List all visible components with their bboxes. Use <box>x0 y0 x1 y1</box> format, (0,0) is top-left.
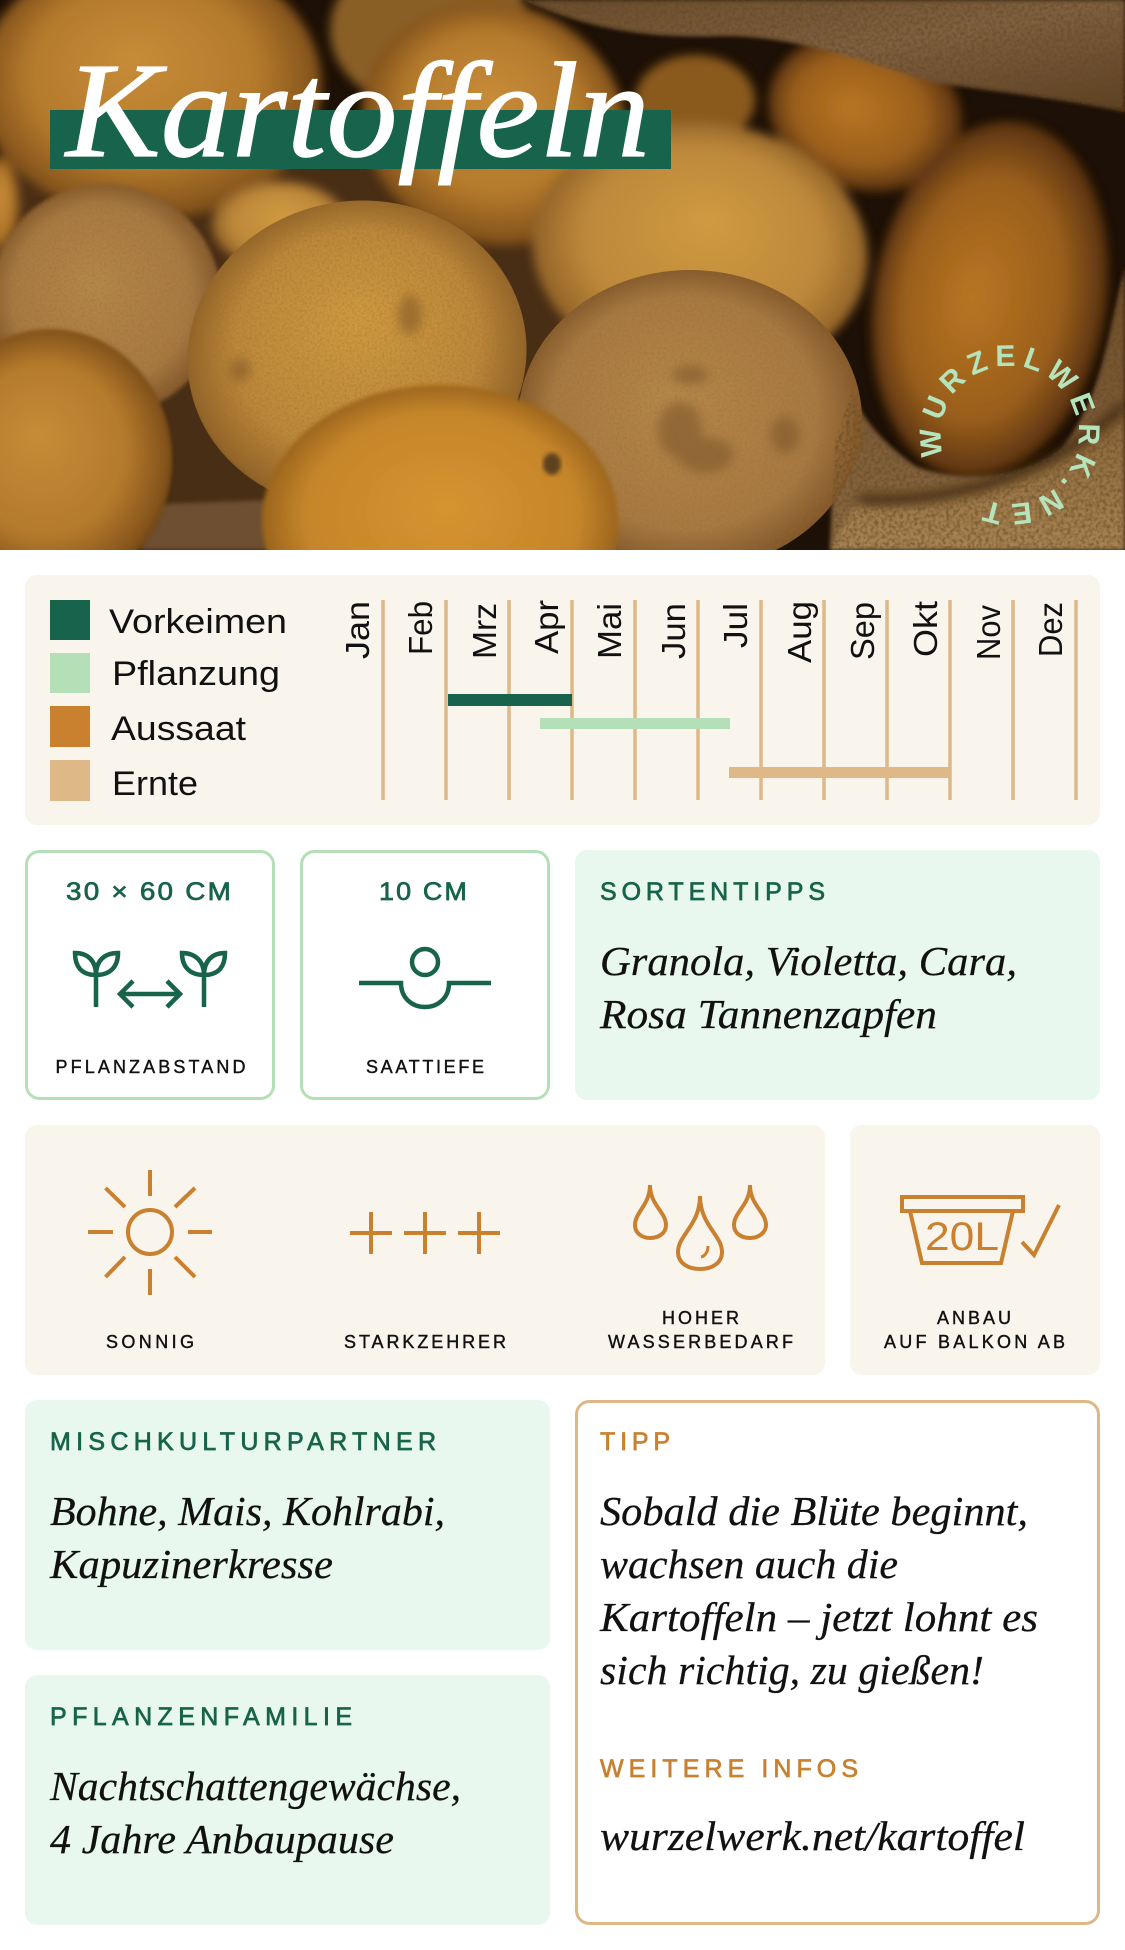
bar: Pflanzung <box>540 718 730 729</box>
legend: Pflanzung <box>50 653 280 693</box>
panel: Tipp: Kartoffeln – jetzt lohnt es <box>599 1594 1038 1640</box>
panel: Pflanzabstand: PFLANZABSTAND <box>56 1057 246 1077</box>
month grid lines <box>383 600 1076 800</box>
panel: balcony: AUF BALKON AB <box>884 1332 1065 1352</box>
panel: Tipp: wurzelwerk.net/kartoffel <box>600 1813 1025 1859</box>
month labels: Mai <box>591 603 628 659</box>
panel: Pflanzabstand: 30 × 60 CM <box>66 878 233 906</box>
panel: Pflanzabstand <box>26 852 274 1098</box>
panel: Tipp: sich richtig, zu gießen! <box>600 1647 984 1693</box>
hero photo: potatoes in burlap sack <box>0 0 1125 655</box>
month labels: Mrz <box>466 603 503 659</box>
panel: balcony: ANBAU <box>937 1308 1011 1328</box>
bar: Ernte <box>729 767 951 778</box>
month labels: Sep <box>844 602 881 660</box>
panel: Saattiefe <box>302 852 548 1098</box>
title: Kartoffeln <box>64 36 650 186</box>
month labels <box>339 600 1069 663</box>
month labels: Okt <box>907 601 944 657</box>
panel: Pflanzenfamilie: PFLANZENFAMILIE <box>50 1703 352 1731</box>
panel: Saattiefe: SAATTIEFE <box>366 1057 484 1077</box>
panel: Mischkulturpartner: MISCHKULTURPARTNER <box>50 1428 436 1456</box>
icon: 20 litre pot with check mark: 20L <box>925 1215 999 1259</box>
legend <box>50 600 287 803</box>
panel: Sortentipps: Granola, Violetta, Cara, <box>600 938 1017 984</box>
panel: Tipp: wachsen auch die <box>600 1541 898 1587</box>
panel: growing conditions: STARKZEHRER <box>344 1332 506 1352</box>
month labels: Jan <box>339 601 376 659</box>
panel: Pflanzenfamilie: 4 Jahre Anbaupause <box>50 1816 394 1862</box>
icon: plants with arrow <box>75 953 225 1007</box>
panel: Mischkulturpartner <box>25 1400 550 1650</box>
icon: 20 litre pot with check mark <box>902 1197 1059 1263</box>
panel: calendar <box>25 575 1100 825</box>
legend: Ernte: Ernte <box>112 765 198 803</box>
icon: seed in soil <box>359 949 491 1007</box>
month labels: Dez <box>1032 602 1069 657</box>
panel: Tipp: Sobald die Blüte beginnt, <box>600 1488 1028 1534</box>
panel: Sortentipps: Rosa Tannenzapfen <box>599 991 937 1037</box>
panel: Tipp <box>576 1402 1098 1924</box>
panel: Pflanzenfamilie <box>25 1675 550 1925</box>
legend: Pflanzung: Pflanzung <box>112 655 280 693</box>
legend: Aussaat: Aussaat <box>111 710 247 748</box>
panel: Tipp: TIPP <box>600 1428 670 1456</box>
panel: Pflanzenfamilie: Nachtschattengewächse, <box>49 1763 461 1809</box>
panel: growing conditions <box>25 1125 825 1375</box>
month labels: Feb <box>402 601 439 655</box>
legend: Ernte <box>50 760 198 803</box>
panel: Mischkulturpartner: Kapuzinerkresse <box>49 1541 333 1587</box>
panel: growing conditions: WASSERBEDARF <box>608 1332 793 1352</box>
bar: Vorkeimen <box>448 694 572 706</box>
icon: three plus signs <box>350 1212 500 1254</box>
panel: Sortentipps <box>575 850 1100 1100</box>
icon: sun <box>88 1170 212 1295</box>
legend: Aussaat <box>50 706 247 748</box>
panel: Sortentipps: SORTENTIPPS <box>600 878 825 906</box>
icon: water drops <box>635 1185 766 1269</box>
title banner <box>50 110 671 169</box>
month labels: Aug <box>781 601 818 663</box>
panel: Saattiefe: 10 CM <box>379 878 469 906</box>
legend: Vorkeimen <box>50 600 287 641</box>
month labels: Apr <box>528 600 565 654</box>
month labels: Jun <box>655 603 692 659</box>
panel: growing conditions: HOHER <box>662 1308 739 1328</box>
month labels: Jul <box>717 603 754 648</box>
legend: Vorkeimen: Vorkeimen <box>109 603 287 641</box>
month labels: Nov <box>970 605 1007 660</box>
circular logo text: WURZELWERK.NET <box>920 345 1100 525</box>
panel: Mischkulturpartner: Bohne, Mais, Kohlrabi, <box>50 1488 445 1534</box>
panel: growing conditions: SONNIG <box>106 1332 194 1352</box>
panel: Tipp: WEITERE INFOS <box>600 1755 858 1783</box>
panel: balcony <box>850 1125 1100 1375</box>
